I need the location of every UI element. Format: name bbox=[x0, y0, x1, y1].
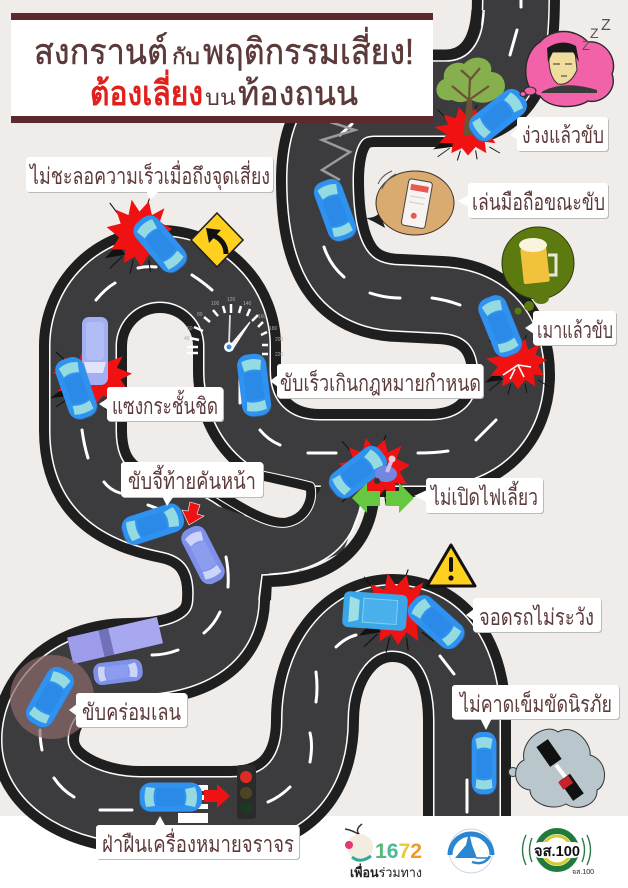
car: drowsy bbox=[464, 84, 532, 147]
crash: turn signal bbox=[324, 435, 412, 507]
speedometer gauge: 140 bbox=[243, 301, 252, 307]
road junction: lower rim bbox=[259, 500, 373, 600]
highlight circle bbox=[10, 655, 94, 739]
speedometer gauge: 160 bbox=[258, 314, 267, 320]
car: phone use bbox=[311, 176, 360, 245]
title panel bbox=[11, 13, 433, 123]
label: straddling lanes bbox=[69, 693, 188, 728]
label: no seatbelt bbox=[452, 685, 620, 730]
driver face bbox=[541, 42, 597, 93]
speedometer gauge: 120 bbox=[227, 297, 236, 303]
speedometer gauge: 180 bbox=[269, 326, 278, 332]
icon: tree bbox=[436, 58, 505, 136]
label: overtaking: แซงกระชั้นชิด bbox=[112, 390, 218, 419]
label: speeding: ขับเร็วเกินกฎหมายกำหนด bbox=[280, 368, 481, 396]
label: drowsy: ง่วงแล้วขับ bbox=[522, 122, 604, 148]
title line 1: กับ bbox=[172, 44, 200, 69]
label: straddling lanes: ขับคร่อมเลน bbox=[82, 699, 181, 725]
label: running light: ฝ่าฝืนเครื่องหมายจราจร bbox=[102, 828, 294, 857]
road network bbox=[35, 0, 516, 816]
purple car: oncoming bbox=[92, 658, 144, 686]
logo: js100 radio: จส.100 bbox=[534, 843, 580, 860]
crash: tailgating van and car bbox=[50, 317, 134, 423]
chalk body outline bbox=[503, 365, 531, 379]
crosswalk bbox=[178, 785, 208, 823]
van bbox=[82, 317, 108, 385]
logo: 1672: เพื่อนร่วมทาง bbox=[350, 863, 422, 880]
motorcycle rider bbox=[374, 456, 397, 484]
title line 2: ท้องถนน bbox=[238, 75, 358, 113]
title line 2: บน bbox=[205, 85, 236, 110]
speedometer gauge: 200 bbox=[275, 337, 284, 343]
sleeping z letters: Z bbox=[601, 17, 611, 34]
logo: 1672: 1672 bbox=[375, 840, 422, 863]
sleeping z letters: Z bbox=[582, 38, 590, 53]
road island tip bbox=[180, 470, 311, 522]
thought bubble: beer bbox=[502, 227, 574, 314]
road junction: asphalt patch bbox=[215, 445, 400, 600]
logo: 1672 bbox=[345, 824, 422, 880]
label: overtaking bbox=[99, 387, 224, 422]
label: no slowdown bbox=[26, 157, 274, 200]
thought bubble: seatbelt bbox=[508, 729, 605, 807]
label: phone bbox=[458, 183, 609, 219]
label: tailgating bbox=[121, 462, 264, 506]
car: running light bbox=[139, 782, 202, 812]
car: no slowdown bbox=[129, 211, 192, 278]
car: drunk bbox=[475, 292, 548, 394]
label: speeding bbox=[270, 364, 484, 399]
speedometer gauge: 220 bbox=[275, 352, 284, 358]
title line 2 bbox=[90, 69, 358, 113]
red arrow: running light bbox=[204, 784, 230, 808]
title line 1: พฤติกรรมเสี่ยง! bbox=[203, 27, 414, 72]
traffic light bbox=[237, 765, 256, 819]
logo: js100 radio bbox=[522, 831, 594, 876]
label: drunk bbox=[525, 311, 617, 346]
speedometer gauge: 60 bbox=[187, 326, 193, 332]
title line 1: สงกรานต์ bbox=[34, 31, 168, 72]
red arrow: tailgating bbox=[182, 502, 204, 525]
truck bbox=[67, 617, 163, 664]
speedometer gauge bbox=[184, 297, 284, 358]
label: drowsy bbox=[510, 117, 609, 152]
purple car ahead bbox=[178, 522, 228, 588]
green turn arrows bbox=[352, 483, 414, 513]
sleeping z letters: Z bbox=[590, 25, 599, 41]
warning sign bbox=[427, 545, 475, 586]
car: no seatbelt bbox=[472, 732, 497, 795]
icon: curve road sign bbox=[191, 213, 243, 267]
crash burst: careless parking bbox=[359, 570, 434, 652]
logo: tourism authority bbox=[449, 829, 493, 873]
label: no turn signal bbox=[414, 478, 544, 514]
car: parking crash bbox=[403, 590, 470, 654]
label: no slowdown: ไม่ชะลอความเร็วเมื่อถึงจุดเสี่ยง bbox=[28, 160, 270, 190]
speedometer gauge: 40 bbox=[184, 336, 190, 342]
beer mug bbox=[519, 238, 556, 284]
car: speeding bbox=[236, 352, 273, 419]
speedometer gauge: 100 bbox=[211, 301, 220, 307]
footer band bbox=[0, 816, 628, 888]
logo: js100 radio: จส.100 bbox=[572, 869, 594, 876]
road center dashes bbox=[40, 0, 521, 812]
title line 2: ต้องเลี่ยง bbox=[90, 69, 203, 113]
label: running light bbox=[96, 816, 300, 860]
car: overtaking bbox=[52, 354, 101, 423]
label: no turn signal: ไม่เปิดไฟเลี้ยว bbox=[429, 481, 538, 510]
crash burst: no slowdown bbox=[105, 196, 174, 274]
crash burst: drowsy bbox=[433, 105, 500, 161]
speedometer gauge: 80 bbox=[197, 312, 203, 318]
sleeping z letters bbox=[582, 17, 611, 53]
van: parked bbox=[342, 591, 408, 631]
seatbelt buckle bbox=[536, 739, 584, 801]
road: upper band rim bbox=[433, 10, 500, 80]
thought bubble: phone bbox=[366, 171, 454, 235]
thought bubble: sleeping driver bbox=[520, 17, 614, 107]
label: tailgating: ขับจี้ท้ายคันหน้า bbox=[128, 465, 256, 494]
title line 1 bbox=[34, 27, 414, 72]
label: careless parking bbox=[466, 598, 602, 633]
car: tailgating bbox=[118, 501, 187, 548]
skid mark bbox=[322, 122, 355, 180]
car: straddling lanes bbox=[21, 663, 78, 732]
label: careless parking: จอดรถไม่ระวัง bbox=[479, 604, 594, 630]
